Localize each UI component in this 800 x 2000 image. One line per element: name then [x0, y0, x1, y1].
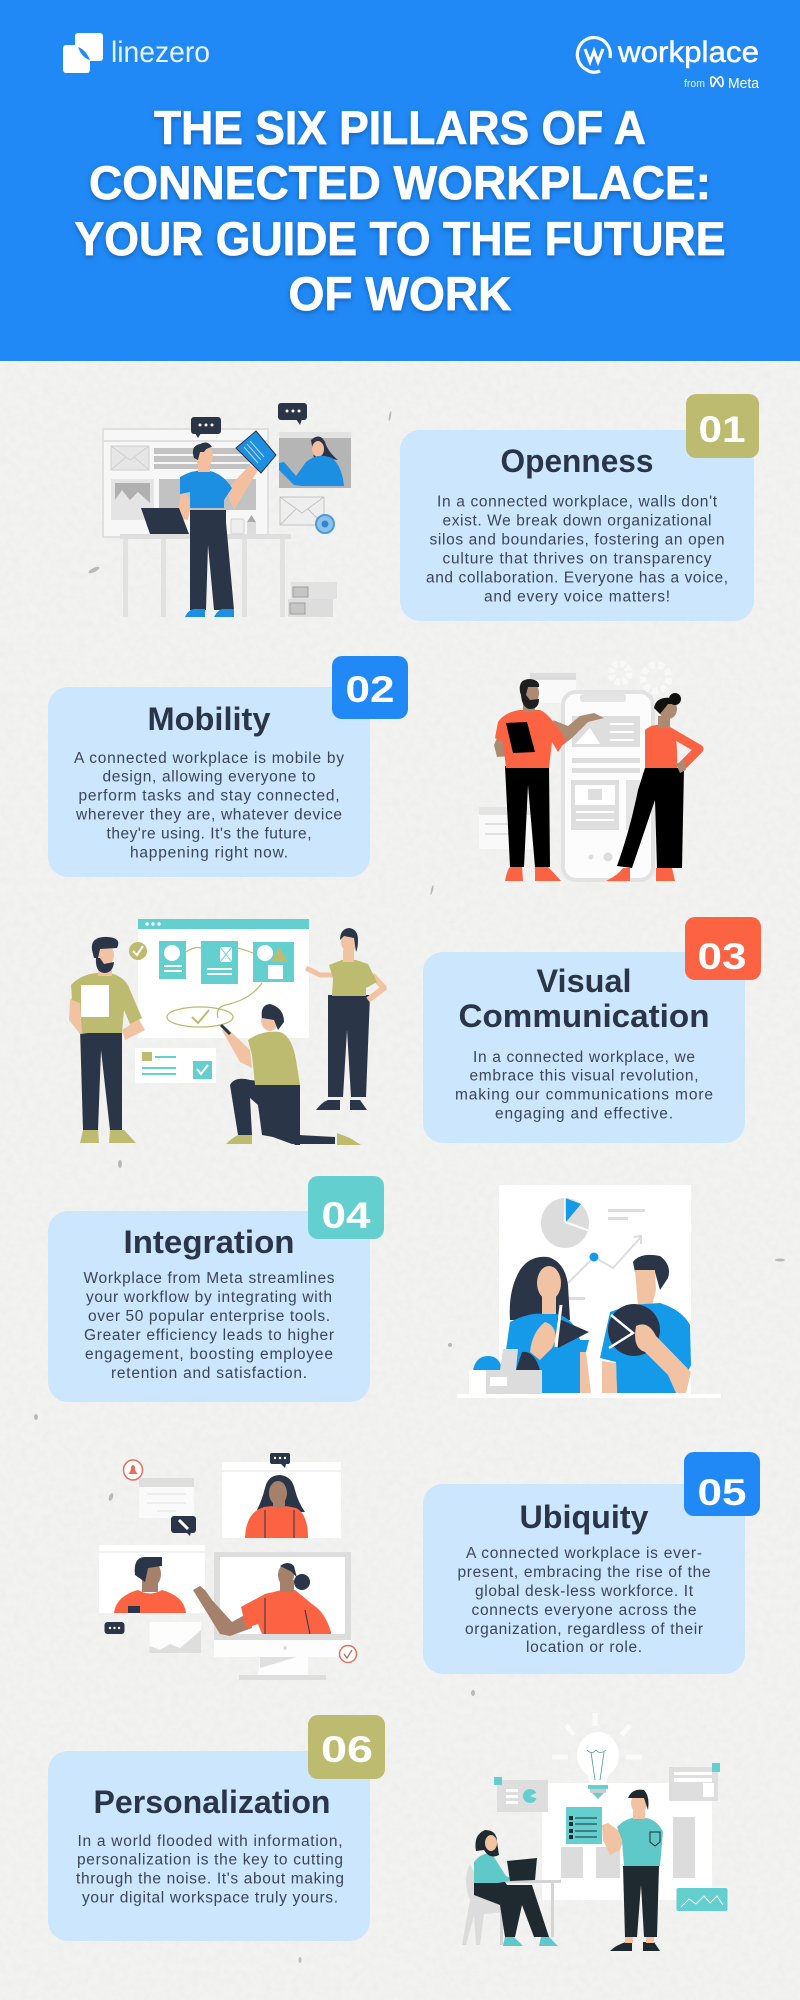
logo: linezero	[63, 33, 210, 73]
man	[494, 679, 604, 881]
body text: connects everyone across the	[472, 1602, 696, 1619]
body text: and every voice matters!	[484, 588, 670, 606]
seated woman	[462, 1830, 561, 1946]
teal cards	[159, 941, 294, 984]
heading: Mobility	[148, 701, 271, 737]
number badge 06: 06	[321, 1729, 373, 1770]
body text: design, allowing everyone to	[102, 768, 316, 786]
body text: In a connected workplace, walls don't	[437, 494, 718, 510]
top window: woman	[222, 1462, 341, 1538]
body text: retention and satisfaction.	[111, 1365, 307, 1382]
body text: embrace this visual revolution,	[470, 1068, 698, 1084]
body text: they're using. It's the future,	[106, 826, 312, 842]
logo: workplace from Meta: workplace	[617, 36, 759, 69]
title: YOUR GUIDE TO THE FUTURE	[74, 212, 726, 265]
title	[74, 101, 726, 320]
heading: Personalization	[94, 1784, 330, 1820]
body text: culture that thrives on transparency	[442, 550, 712, 568]
illustration: person at desk with video call	[103, 403, 351, 617]
body text: happening right now.	[130, 844, 288, 862]
panel: 06 Personalization	[48, 1715, 385, 1941]
number badge 03: 03	[698, 936, 746, 977]
man with paper	[69, 937, 145, 1143]
man	[600, 1255, 691, 1393]
body text: making our communications more	[455, 1086, 713, 1104]
archive boxes	[288, 582, 337, 617]
printer with half circles	[469, 1349, 542, 1394]
body text: and collaboration. Everyone has a voice,	[426, 570, 728, 586]
heading: Ubiquity	[520, 1499, 649, 1535]
chart card	[676, 1888, 728, 1911]
logo: linezero: linezero	[111, 36, 210, 69]
body text: global desk-less workforce. It	[475, 1583, 694, 1600]
pie chart	[541, 1198, 645, 1248]
number badge 05	[684, 1452, 760, 1516]
illustration: two people holding chart pieces	[457, 1185, 721, 1398]
title: OF WORK	[288, 267, 512, 320]
body text: In a connected workplace, we	[473, 1049, 695, 1066]
number badge 03	[685, 917, 761, 980]
speech bubbles	[191, 403, 307, 438]
illustration: idea, analyst and laptop user	[462, 1713, 728, 1951]
logo: workplace from Meta	[577, 36, 760, 92]
body text: engagement, boosting employee	[85, 1346, 333, 1363]
panel: 04 Integration	[48, 1176, 384, 1402]
number badge 01	[686, 394, 759, 458]
title: CONNECTED WORKPLACE:	[89, 156, 711, 209]
body text: perform tasks and stay connected,	[78, 788, 340, 804]
body text: A connected workplace is mobile by	[74, 750, 344, 767]
number badge 04	[308, 1176, 384, 1239]
body text: engaging and effective.	[495, 1106, 673, 1122]
body text	[455, 1049, 713, 1122]
woman pointing	[306, 928, 384, 1110]
light bulb	[552, 1713, 642, 1799]
gray window right	[669, 1763, 720, 1801]
body text	[458, 1545, 710, 1656]
body text: present, embracing the rise of the	[458, 1564, 710, 1581]
panel: 03 Visual Communication	[423, 917, 761, 1143]
body text: personalization is the key to cutting	[77, 1852, 343, 1868]
monitor	[214, 1552, 351, 1680]
header band	[0, 0, 800, 361]
check icon	[340, 1646, 356, 1662]
body text: exist. We break down organizational	[442, 512, 712, 530]
title: THE SIX PILLARS OF A	[154, 101, 646, 154]
phone	[563, 692, 653, 880]
body text: Workplace from Meta streamlines	[84, 1270, 335, 1287]
phone bubble	[171, 1516, 196, 1536]
logo: workplace from Meta: from	[684, 78, 705, 90]
logo: workplace from Meta: Meta	[728, 75, 760, 92]
woman on monitor	[193, 1563, 331, 1636]
body text	[84, 1270, 335, 1382]
line chart	[568, 1237, 641, 1283]
body text: Greater efficiency leads to higher	[84, 1327, 334, 1344]
panel: 05 Ubiquity	[423, 1452, 760, 1674]
standing man	[602, 1790, 663, 1951]
body text: wherever they are, whatever device	[75, 806, 342, 824]
number badge 01: 01	[698, 409, 746, 450]
left window: man	[99, 1545, 205, 1613]
number badge 05: 05	[698, 1472, 746, 1513]
heading: Integration	[124, 1224, 294, 1260]
teal document	[566, 1807, 602, 1844]
heading: Visual	[536, 963, 632, 999]
body text: your digital workspace truly yours.	[82, 1890, 338, 1906]
heading: Communication	[458, 998, 710, 1034]
video window with woman	[279, 432, 351, 488]
body text	[74, 750, 344, 862]
body text: silos and boundaries, fostering an open	[430, 532, 724, 548]
number badge 02: 02	[346, 669, 394, 710]
heading	[458, 963, 710, 1034]
heading: Openness	[500, 443, 654, 479]
body text: organization, regardless of their	[465, 1621, 703, 1638]
body text: location or role.	[526, 1639, 642, 1656]
kneeling man	[221, 1004, 361, 1145]
body text	[76, 1833, 344, 1906]
body text: your workflow by integrating with	[86, 1289, 332, 1306]
bell icon	[124, 1460, 142, 1480]
woman	[504, 1257, 591, 1393]
illustration: two people beside a phone	[479, 664, 699, 881]
gray window left	[494, 1777, 548, 1812]
person standing	[176, 443, 258, 617]
woman	[606, 693, 699, 881]
panel: 01 Openness	[400, 394, 759, 621]
body text: A connected workplace is ever-	[466, 1545, 702, 1562]
number badge 04: 04	[322, 1195, 371, 1236]
body text: over 50 popular enterprise tools.	[88, 1308, 330, 1325]
body text: through the noise. It's about making	[76, 1870, 344, 1888]
illustration: team at a whiteboard	[69, 919, 384, 1145]
body text: In a world flooded with information,	[78, 1833, 342, 1850]
illustration: video call screens	[99, 1453, 356, 1680]
number badge 06	[308, 1715, 385, 1779]
body text	[426, 494, 728, 606]
number badge 02	[332, 656, 408, 719]
panel: 02 Mobility	[48, 656, 408, 877]
